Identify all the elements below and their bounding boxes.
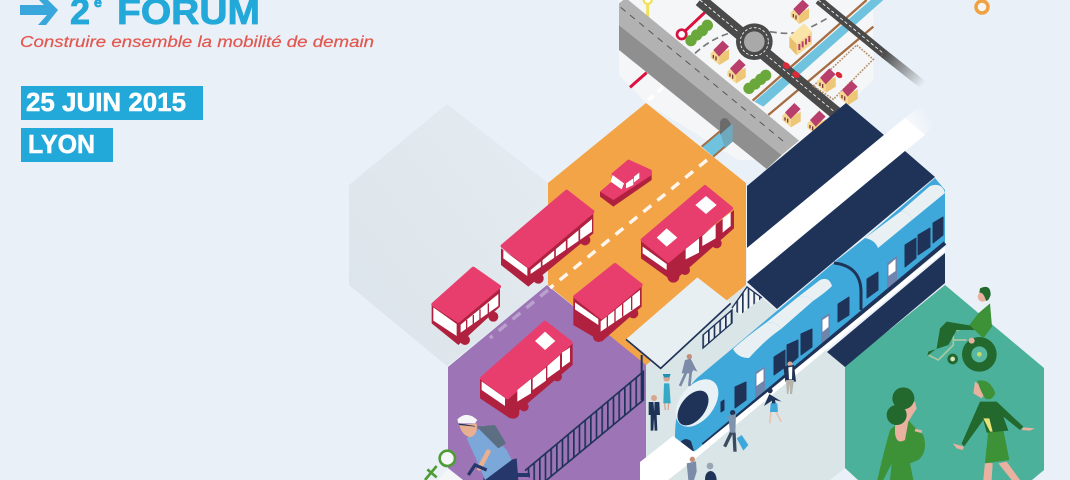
traveller with suitcase [725,410,748,452]
running woman [953,380,1035,480]
navy track middle [747,151,935,309]
panel: purple lower contents [425,323,643,480]
apartment block [789,23,812,55]
panel: station hexagon [646,285,845,480]
white rail [640,247,945,480]
woman in blue dress [663,374,671,410]
panel: purple hexagon [448,285,646,480]
bus: orange center [573,265,642,342]
white dashes [648,87,663,100]
location badge [21,128,113,162]
fading strip end [905,106,936,135]
train body [675,178,945,451]
road markings [490,160,707,338]
back fence [703,287,762,348]
man in dark suit [649,395,660,431]
train [640,178,945,480]
roof segments [733,185,945,358]
hedges [685,20,771,94]
white platform strip [747,118,925,282]
date badge: 25 JUIN 2015 [26,89,186,117]
orange ring icon [976,1,988,13]
arrow icon [20,0,58,25]
windows [721,217,943,412]
panel: railway tracks [747,103,945,367]
fenced plot [813,45,873,99]
woman in green dress [877,387,925,480]
panel: green hexagon [845,285,1044,480]
main road [700,0,923,115]
viaduct [619,0,799,169]
panel: green people [877,287,1035,480]
cyclist [457,415,530,480]
navy track lower [827,253,945,367]
panel: orange road hexagon [548,103,746,366]
green metro line marker [425,451,455,480]
car [600,159,652,207]
bus: purple [480,323,573,419]
passenger blue skirt [764,388,782,423]
buses group upper [432,159,734,345]
bus: long coach [501,192,593,287]
panel: empty gray hexagon [349,104,548,366]
station and passengers [626,277,796,480]
white corner under purple hexagon [438,469,463,480]
map ground [619,0,873,160]
walker near canopy [680,354,697,386]
doors [755,256,897,400]
houses [711,0,858,135]
tagline: Construire ensemble la mobilité de demain [20,34,374,51]
metro lines [630,0,707,87]
bus: orange right [641,187,734,283]
panel: city map [619,0,923,169]
person in wheelchair [927,287,997,372]
location badge: LYON [28,131,95,159]
train nose [667,371,727,435]
title: 2e Forum [20,0,260,32]
coach coupling [834,263,861,310]
bus: left gray hexagon [432,269,500,345]
travellers at bottom [687,457,717,480]
cars on road [781,61,844,79]
station canopy [626,277,731,400]
navy track upper [747,103,884,248]
passenger on platform [783,361,796,394]
roundabout [736,23,773,60]
undercarriage stripe [703,243,945,445]
canal [702,0,883,157]
purple panel fence [525,372,643,480]
dashed secondary roads [695,17,830,53]
